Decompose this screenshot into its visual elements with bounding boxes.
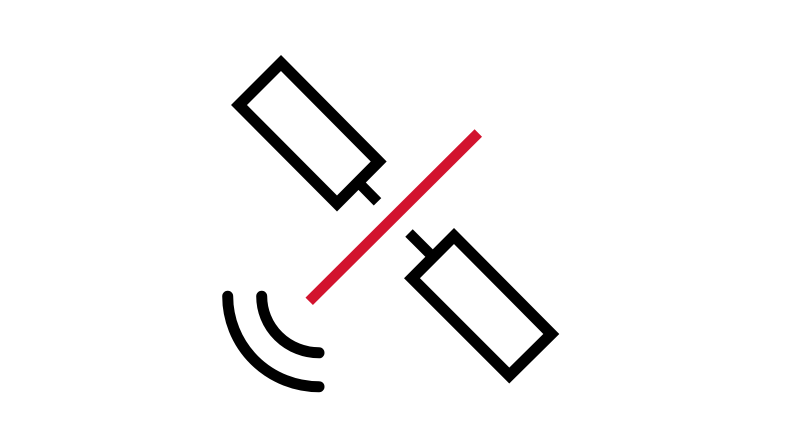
upper connector stem	[358, 182, 378, 202]
lower connector stem	[409, 233, 433, 257]
red center bar	[309, 133, 478, 301]
lower rectangle body	[412, 236, 551, 376]
inner signal wave	[262, 296, 319, 353]
outer signal wave	[228, 296, 319, 387]
upper rectangle body	[239, 63, 379, 204]
